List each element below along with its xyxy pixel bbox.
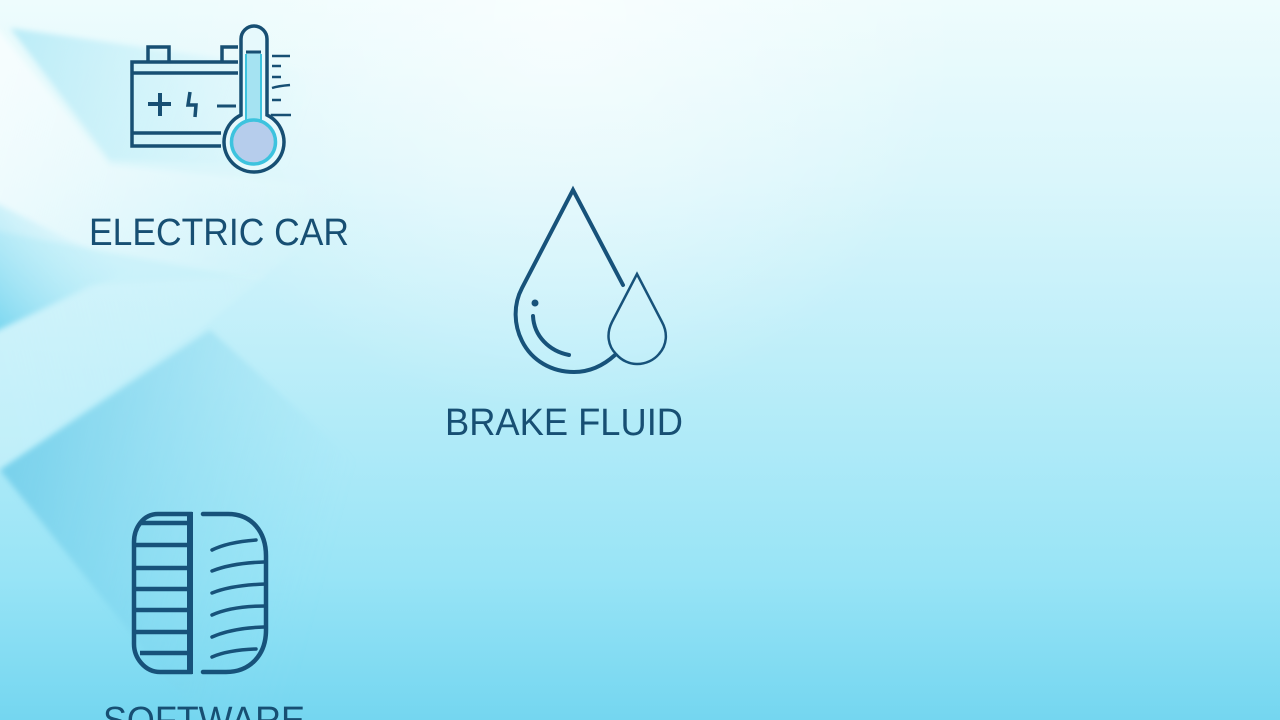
label: electric car: ELECTRIC CAR <box>89 212 349 254</box>
label: brake fluid: BRAKE FLUID <box>445 402 683 444</box>
small drop <box>609 274 666 364</box>
thermometer <box>224 26 284 172</box>
icon: battery with thermometer <box>132 26 291 172</box>
icon: brake fluid drops <box>516 190 666 372</box>
icon: tire <box>134 512 266 674</box>
